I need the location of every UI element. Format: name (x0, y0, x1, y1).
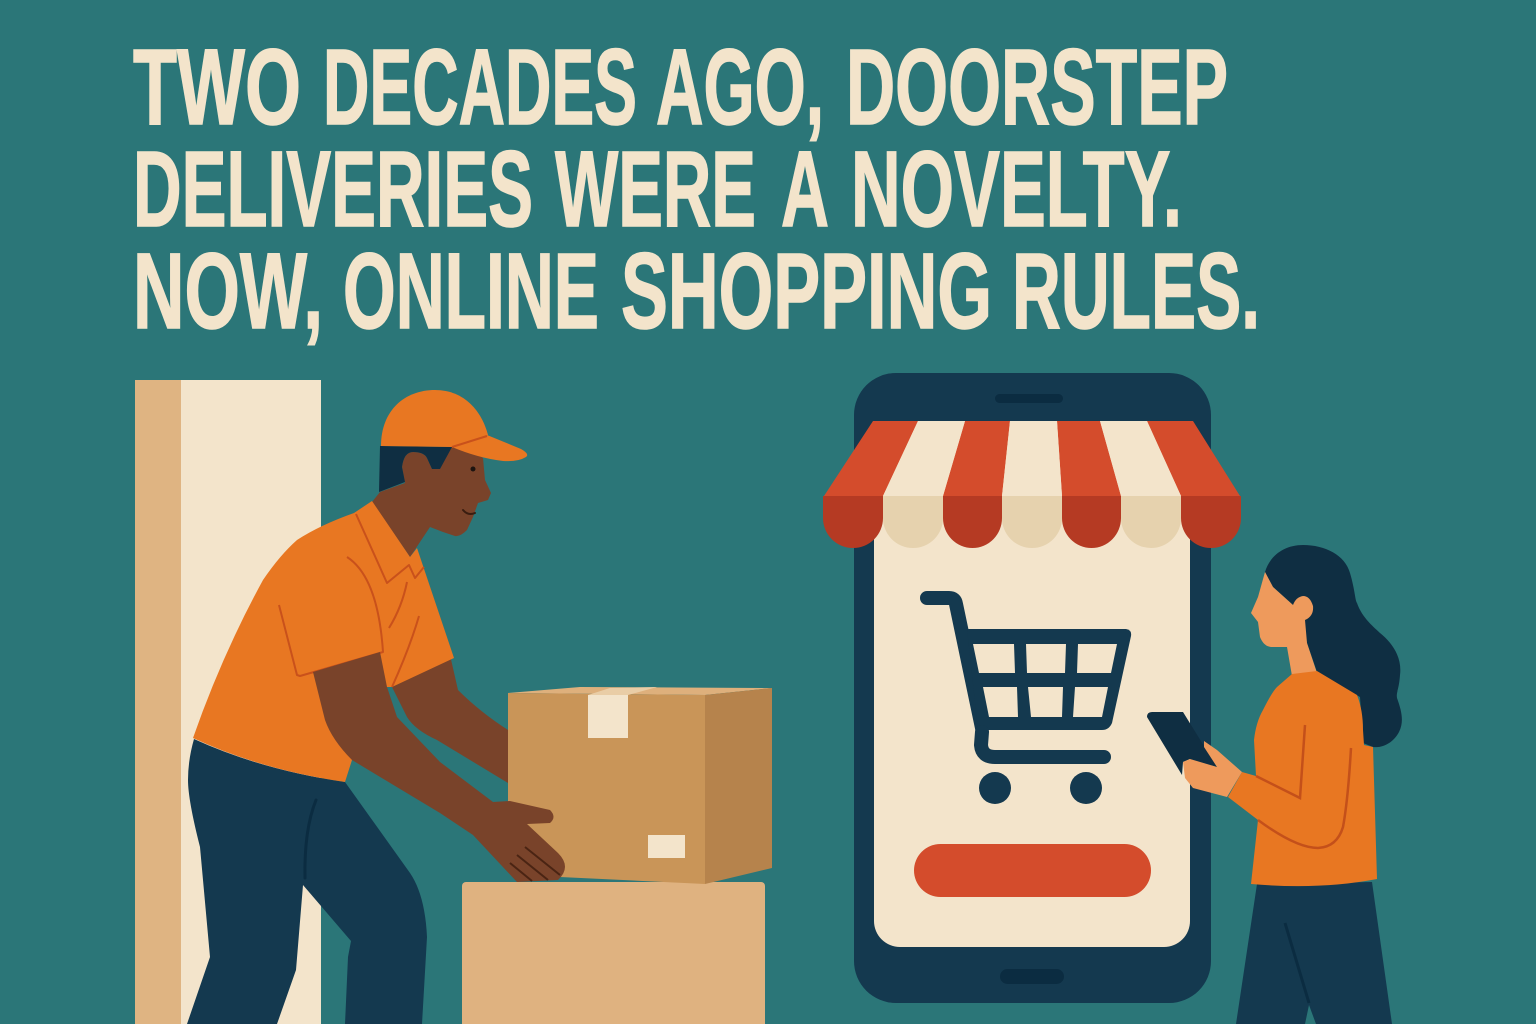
woman: hand (1183, 741, 1242, 797)
woman: face and neck (1251, 572, 1317, 676)
woman: trouser seam (1285, 923, 1309, 1003)
title: RULES. (1012, 230, 1260, 351)
title: A (781, 128, 829, 249)
title (133, 26, 1260, 351)
title: AGO, (656, 26, 824, 147)
checkout button (914, 844, 1151, 897)
title: DECADES (323, 26, 637, 147)
title: SHOPPING (621, 230, 992, 351)
upper cardboard box (508, 687, 772, 884)
shopping cart icon (927, 598, 1131, 804)
striped awning (823, 421, 1241, 548)
lower cardboard box (462, 882, 765, 1024)
woman: hair (1265, 545, 1402, 747)
man: head and neck (372, 446, 491, 557)
title: NOW, (133, 230, 323, 351)
woman: sweater (1228, 671, 1377, 886)
man: near arm and hand (313, 652, 565, 882)
delivery man (187, 390, 527, 1024)
man: far arm (392, 655, 508, 783)
man: cap (381, 390, 527, 461)
man: trousers (187, 739, 427, 1024)
phone speaker (995, 394, 1063, 403)
title: TWO (133, 26, 301, 147)
man: shirt (193, 501, 454, 782)
woman with tablet (1147, 545, 1402, 1024)
door (135, 380, 321, 1024)
title: ONLINE (343, 230, 599, 351)
title: DOORSTEP (846, 26, 1228, 147)
phone body (854, 373, 1211, 1003)
title: WERE (555, 128, 756, 249)
smartphone storefront (823, 373, 1241, 1003)
title: DELIVERIES (133, 128, 533, 249)
phone screen (874, 421, 1190, 947)
title: NOVELTY. (851, 128, 1182, 249)
woman: tablet (1147, 712, 1217, 775)
woman: trousers (1236, 882, 1392, 1024)
phone home button (1000, 969, 1064, 984)
